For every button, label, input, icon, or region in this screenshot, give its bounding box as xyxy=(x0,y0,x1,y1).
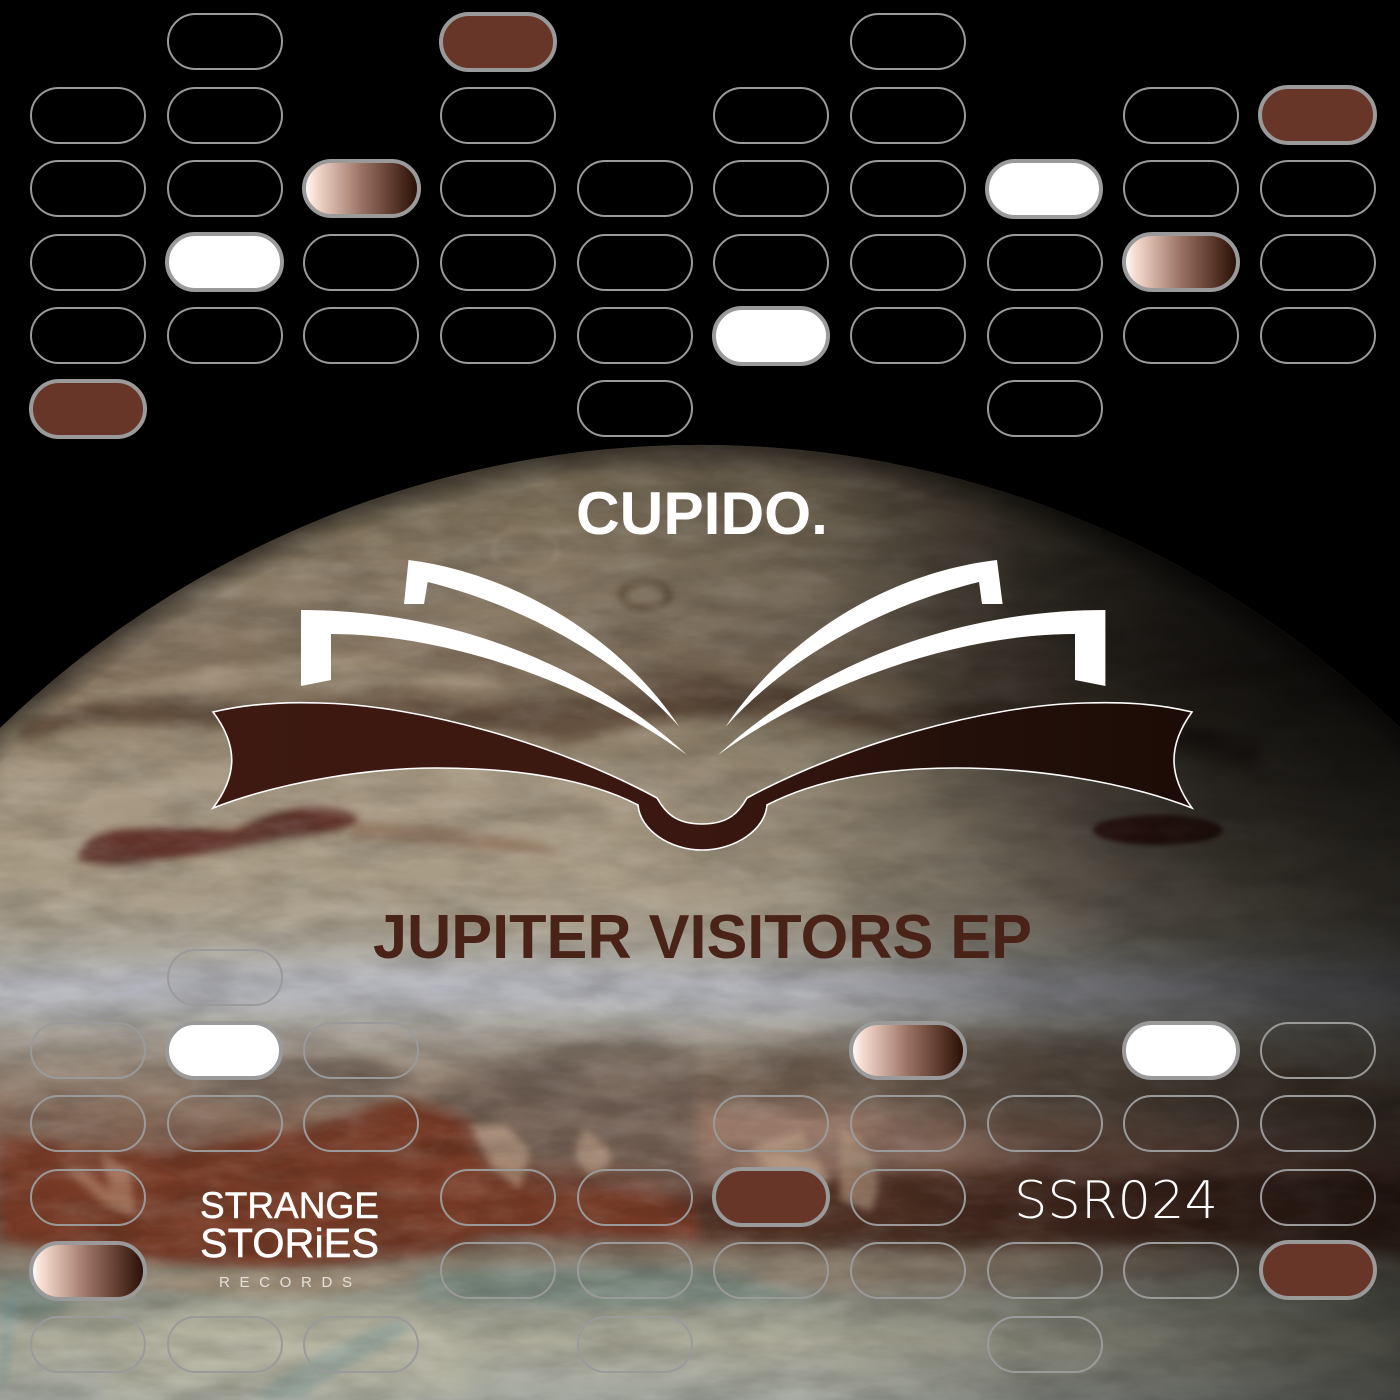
icon: open book logo xyxy=(213,560,1192,850)
planet: light zone below upper band xyxy=(0,759,640,811)
book: back left page xyxy=(404,560,680,727)
gradient pill column 3 xyxy=(304,161,419,216)
planet: cream wisps above brown band xyxy=(72,649,526,706)
planet: right grey-brown band xyxy=(700,1038,1400,1150)
release title: JUPITER VISITORS EP xyxy=(373,903,1032,972)
planet: rust belt xyxy=(0,1100,700,1267)
book: cover xyxy=(213,703,1192,850)
planet: Jupiter xyxy=(0,440,1400,1400)
pills column 10 xyxy=(1261,1023,1375,1225)
brown pill column 4 xyxy=(441,14,555,70)
pills column 2 xyxy=(168,14,282,363)
planet: left red storm xyxy=(78,807,358,864)
book: back right page xyxy=(726,560,1003,727)
white pill column 2 xyxy=(167,234,282,290)
pills column 4 xyxy=(441,88,555,363)
gradient pill column 7 xyxy=(851,1023,965,1078)
planet: limb shading xyxy=(0,445,1400,760)
logo line: records: RECORDS xyxy=(219,1274,352,1291)
white pill column 6 xyxy=(714,308,828,364)
planet: pale cloud band xyxy=(0,962,1098,1022)
planet: small ring spot xyxy=(621,582,669,608)
planet: right red storm xyxy=(1093,815,1223,845)
pills column 1 xyxy=(31,1023,145,1372)
planet: grey mountain wisps xyxy=(180,1041,700,1180)
brown pill column 10 xyxy=(1261,1242,1375,1298)
pills column 5 xyxy=(578,161,692,436)
planet: right side shadow xyxy=(846,490,1400,1400)
brown pill column 10 xyxy=(1260,87,1375,143)
pills column 6 xyxy=(714,1096,828,1298)
planet: cream swirls in belt xyxy=(470,1125,878,1210)
planet: faint orange streak xyxy=(350,822,575,855)
planet: teal lower band xyxy=(0,1267,840,1320)
planet: light texture xyxy=(0,440,1400,1400)
planet: right dark belt xyxy=(700,1174,1400,1255)
planet: pink brown band xyxy=(700,1105,1060,1180)
white pill column 2 xyxy=(167,1023,281,1078)
pills column 8 xyxy=(988,235,1102,436)
pills column 7 xyxy=(851,14,965,363)
bottom pill grid xyxy=(31,950,1375,1372)
logo line: strange: STRANGE xyxy=(200,1184,379,1226)
book: front right page xyxy=(718,610,1105,755)
label logo: Strange Stories Records xyxy=(200,1184,379,1291)
pills column 10 xyxy=(1261,161,1375,363)
brown pill column 1 xyxy=(31,381,145,437)
pills column 4 xyxy=(441,1170,555,1298)
planet: swirl feature xyxy=(493,528,557,572)
pills column 9 xyxy=(1124,88,1238,363)
pills column 3 xyxy=(304,235,418,363)
planet: dark texture xyxy=(0,440,1400,1400)
planet: blue streaks xyxy=(0,1300,410,1400)
top pill grid xyxy=(31,14,1375,437)
pills column 1 xyxy=(31,88,145,363)
pills column 2 xyxy=(168,950,282,1372)
pills column 7 xyxy=(851,1096,965,1298)
white pill column 8 xyxy=(987,161,1101,217)
brown pill column 6 xyxy=(714,1169,828,1225)
planet: lower cream swirl xyxy=(100,1300,470,1400)
planet: upper dark brown band xyxy=(20,677,1260,770)
pills column 6 xyxy=(714,88,828,290)
book: front left page xyxy=(301,610,687,755)
gradient pill column 9 xyxy=(1124,234,1238,290)
artist name: CUPIDO. xyxy=(576,480,828,547)
planet: tan strip under right belt xyxy=(817,1242,1078,1285)
pills column 5 xyxy=(578,1170,692,1372)
white pill column 9 xyxy=(1124,1023,1238,1078)
pills column 9 xyxy=(1124,1096,1238,1298)
gradient pill column 1 xyxy=(31,1243,145,1299)
planet: upper right shadow xyxy=(634,446,1400,1130)
pills column 3 xyxy=(304,1023,418,1372)
planet: rust to cream transition xyxy=(120,1268,420,1298)
planet: left band highlight xyxy=(60,1150,135,1215)
logo line: stories: STORiES xyxy=(200,1220,379,1266)
catalogue number: SSR024 xyxy=(1014,1171,1218,1231)
pills column 8 xyxy=(988,1096,1102,1372)
